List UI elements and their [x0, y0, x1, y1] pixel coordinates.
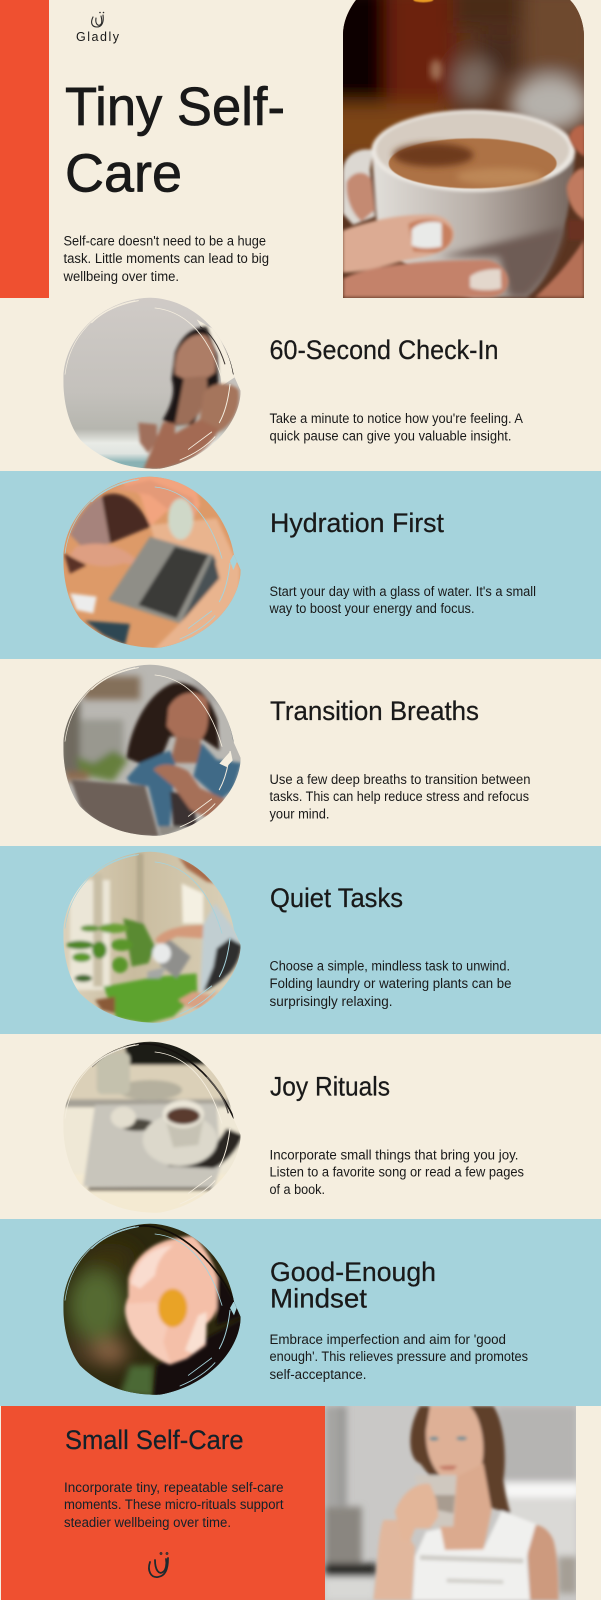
- cup handle: [343, 149, 375, 225]
- heading: Mindset: [270, 1284, 368, 1314]
- circle photo: woman with closed eyes: [60, 296, 245, 471]
- body text: [270, 1332, 528, 1382]
- body text: Take a minute to notice how you're feeling. A: [270, 411, 523, 426]
- body text: of a book.: [270, 1182, 325, 1197]
- hand: [395, 1484, 438, 1542]
- heading: Small Self-Care: [65, 1425, 244, 1455]
- band: Hydration First: [0, 471, 601, 659]
- body text: quick pause can give you valuable insight.: [270, 429, 512, 444]
- cup rim: [371, 110, 575, 192]
- circle photo: watering plants: [60, 850, 245, 1025]
- body text: [270, 959, 512, 1009]
- intro text: Self-care doesn't need to be a huge: [64, 234, 266, 248]
- body text: surprisingly relaxing.: [270, 994, 392, 1009]
- body text: self-acceptance.: [270, 1367, 366, 1382]
- logo: Gladly: Gladly: [76, 30, 120, 44]
- heading: Hydration First: [270, 508, 444, 538]
- body text: Listen to a favorite song or read a few pages: [270, 1165, 524, 1180]
- heading: 60-Second Check-In: [270, 335, 498, 365]
- title: Care: [65, 144, 182, 204]
- intro text: [63, 234, 269, 284]
- body text: steadier wellbeing over time.: [64, 1515, 231, 1530]
- icon: logo mark: [149, 1553, 168, 1577]
- photo: woman drinking water: [320, 1400, 587, 1600]
- circle photo: laptop and water: [60, 475, 245, 650]
- hair: [410, 1406, 511, 1513]
- circle photo: woman hand on chest: [60, 663, 245, 838]
- band: Transition Breaths: [60, 663, 530, 838]
- title: [65, 77, 285, 204]
- body text: tasks. This can help reduce stress and refocus: [270, 789, 529, 804]
- body text: Start your day with a glass of water. It's a small: [270, 584, 536, 599]
- band: Joy Rituals: [60, 1040, 524, 1215]
- photo: coffee cup in hands: [343, 0, 584, 298]
- body text: Use a few deep breaths to transition between: [270, 772, 530, 787]
- body text: way to boost your energy and focus.: [269, 601, 474, 616]
- heading: Good-Enough: [270, 1257, 436, 1287]
- heading: Transition Breaths: [270, 696, 479, 726]
- panel: Small Self-Care footer: [1, 1406, 325, 1600]
- fingers: [343, 215, 454, 273]
- body text: your mind.: [270, 807, 330, 822]
- red side bar: [0, 0, 49, 298]
- intro text: task. Little moments can lead to big: [64, 251, 269, 266]
- cup body: [372, 150, 575, 297]
- intro text: wellbeing over time.: [63, 269, 179, 284]
- body text: Folding laundry or watering plants can be: [270, 976, 512, 991]
- band: Quiet Tasks: [0, 846, 601, 1034]
- heading: Joy Rituals: [270, 1072, 390, 1102]
- band: Good-Enough Mindset: [0, 1219, 601, 1406]
- section band: 60-Second Check-In: [60, 296, 523, 471]
- logo: Gladly: [76, 12, 120, 44]
- body text: Choose a simple, mindless task to unwind.: [270, 959, 510, 974]
- coffee: [389, 138, 557, 188]
- body text: [270, 1147, 524, 1197]
- heading: [270, 1257, 436, 1314]
- circle photo: pink flower: [60, 1222, 245, 1397]
- body text: [269, 584, 536, 616]
- body text: enough'. This relieves pressure and promotes: [270, 1349, 528, 1364]
- dress: [413, 1511, 536, 1600]
- body text: [64, 1480, 284, 1530]
- glass: [415, 1475, 457, 1527]
- face: [426, 1406, 483, 1485]
- body text: [270, 772, 530, 822]
- title: Tiny Self-: [65, 77, 285, 137]
- body text: Embrace imperfection and aim for 'good: [270, 1332, 506, 1347]
- body text: moments. These micro-rituals support: [64, 1497, 284, 1512]
- circle photo: coffee and newspaper: [60, 1040, 245, 1215]
- body text: Incorporate tiny, repeatable self-care: [64, 1480, 284, 1495]
- arms: [527, 1525, 558, 1600]
- neck and chest: [440, 1463, 492, 1550]
- heading: Quiet Tasks: [270, 883, 403, 913]
- body text: Incorporate small things that bring you joy.: [270, 1147, 518, 1162]
- body text: [270, 411, 523, 444]
